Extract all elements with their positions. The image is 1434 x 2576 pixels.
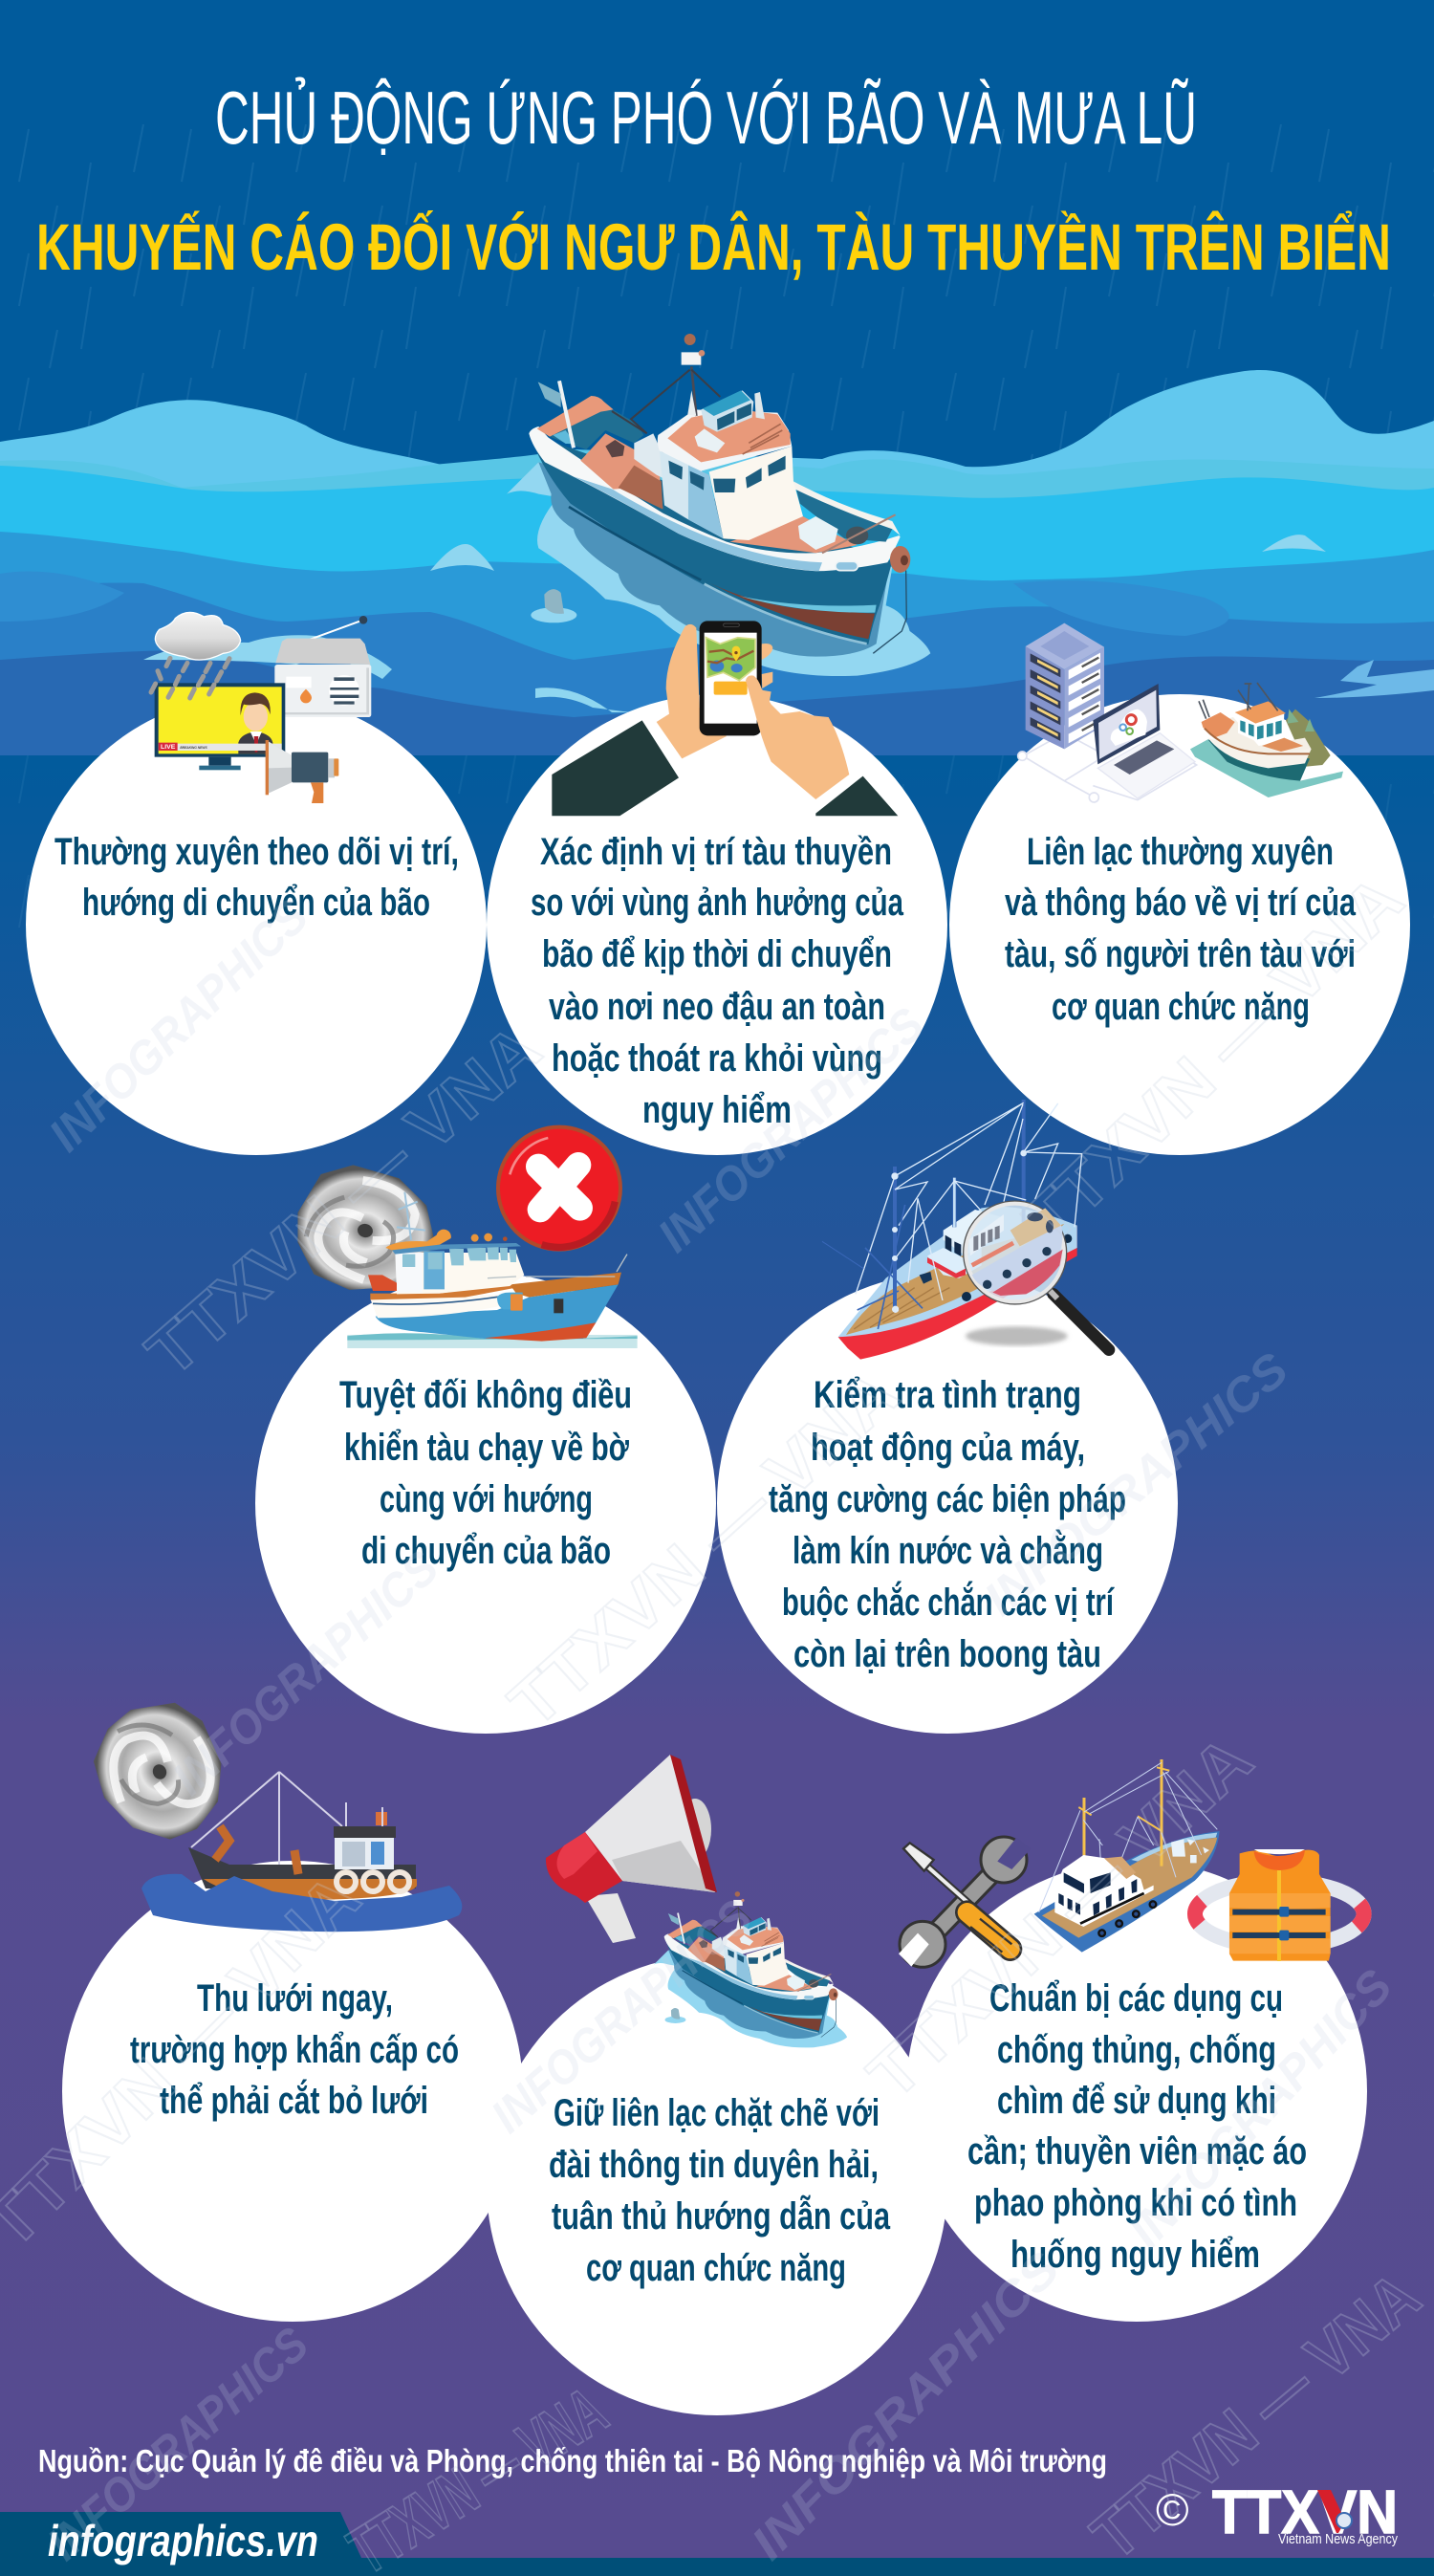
watermarks: INFOGRAPHICS bbox=[648, 997, 934, 1262]
watermarks: TTXVN — VNA bbox=[133, 1010, 554, 1390]
circle bbox=[26, 694, 487, 1155]
circle bbox=[906, 1861, 1367, 2322]
text: Kiểm tra tình trạng bbox=[814, 1374, 1081, 1416]
rain bbox=[0, 124, 1434, 497]
text: trường hợp khẩn cấp có bbox=[130, 2029, 459, 2071]
panel: monitor the storm bbox=[26, 612, 487, 1155]
sea waves bbox=[0, 370, 1434, 755]
text bbox=[130, 1977, 459, 2122]
rain over lower background bbox=[0, 755, 1434, 947]
text: cơ quan chức năng bbox=[586, 2247, 846, 2289]
text bbox=[967, 1977, 1307, 2276]
icon: weather news, radio and megaphone bbox=[151, 612, 371, 803]
icon: weather news, radio and megaphone: LIVE bbox=[161, 744, 175, 751]
text: phao phòng khi có tình bbox=[974, 2182, 1297, 2224]
text: hoạt động của máy, bbox=[811, 1427, 1085, 1469]
panel: stay in contact bbox=[949, 623, 1410, 1155]
text: buộc chắc chắn các vị trí bbox=[782, 1580, 1115, 1624]
icon: motor boat bbox=[347, 1192, 638, 1348]
text bbox=[769, 1374, 1126, 1675]
panel: inspect engine and deck bbox=[717, 1100, 1178, 1734]
panel: locate vessel bbox=[487, 621, 947, 1155]
text: nguy hiểm bbox=[642, 1089, 792, 1131]
text: di chuyển của bão bbox=[361, 1530, 611, 1572]
website label: infographics.vn bbox=[48, 2516, 318, 2565]
text: làm kín nước và chằng bbox=[793, 1528, 1103, 1572]
watermarks: INFOGRAPHICS bbox=[741, 2241, 1070, 2570]
text: Giữ liên lạc chặt chẽ với bbox=[554, 2092, 880, 2134]
watermarks: INFOGRAPHICS bbox=[1119, 1959, 1402, 2259]
logo: TTXVN: Vietnam News Agency bbox=[1278, 2531, 1398, 2547]
icon: trawler under magnifying glass bbox=[822, 1100, 1109, 1360]
text: thể phải cắt bỏ lưới bbox=[160, 2078, 428, 2122]
panel: retrieve nets bbox=[62, 1685, 523, 2322]
icon: storm bbox=[282, 1154, 447, 1307]
panel: do not sail with storm bbox=[255, 1127, 716, 1734]
text: Liên lạc thường xuyên bbox=[1027, 831, 1334, 873]
icon: storm bbox=[76, 1685, 243, 1859]
text bbox=[531, 831, 904, 1131]
watermarks bbox=[0, 862, 1433, 2576]
text: khiển tàu chạy về bờ bbox=[344, 1427, 629, 1469]
panel: prepare equipment bbox=[899, 1759, 1367, 2322]
icon: weather news, radio and megaphone: BREAKING NEWS bbox=[180, 746, 207, 750]
watermarks: TTXVN — VNA bbox=[854, 1721, 1266, 2113]
text bbox=[1005, 831, 1357, 1028]
circle bbox=[487, 694, 947, 1155]
logo: TTXVN: TTXVN bbox=[1212, 2478, 1398, 2546]
text: cần; thuyền viên mặc áo bbox=[967, 2130, 1307, 2172]
circle bbox=[255, 1273, 716, 1734]
text: vào nơi neo đậu an toàn bbox=[549, 986, 885, 1028]
icon: small fishing boat bbox=[654, 1891, 847, 2047]
text: Thường xuyên theo dõi vị trí, bbox=[54, 831, 459, 873]
text: Xác định vị trí tàu thuyền bbox=[540, 831, 892, 873]
watermarks: INFOGRAPHICS bbox=[481, 1889, 762, 2143]
watermarks: INFOGRAPHICS bbox=[974, 1343, 1298, 1626]
text: còn lại trên boong tàu bbox=[793, 1633, 1101, 1675]
circle bbox=[949, 694, 1410, 1155]
text: đài thông tin duyên hải, bbox=[549, 2144, 879, 2186]
text: chìm để sử dụng khi bbox=[997, 2080, 1276, 2122]
text: hướng di chuyển của bão bbox=[82, 882, 430, 924]
text bbox=[339, 1374, 632, 1572]
text: tăng cường các biện pháp bbox=[769, 1478, 1126, 1520]
icon: server, laptop and boat bbox=[1018, 623, 1343, 802]
text: Tuyệt đối không điều bbox=[339, 1374, 632, 1416]
text: tuân thủ hướng dẫn của bbox=[552, 2194, 891, 2238]
watermarks: INFOGRAPHICS bbox=[39, 889, 318, 1162]
text: so với vùng ảnh hưởng của bbox=[531, 882, 904, 924]
watermarks: TTXVN — VNA bbox=[1010, 862, 1417, 1258]
watermarks: INFOGRAPHICS bbox=[163, 1540, 448, 1805]
text: hoặc thoát ra khỏi vùng bbox=[552, 1037, 882, 1080]
text bbox=[549, 2092, 891, 2289]
panel: stay in touch with coastal radio bbox=[487, 1755, 947, 2415]
watermarks: INFOGRAPHICS bbox=[37, 2317, 318, 2570]
text: huống nguy hiểm bbox=[1010, 2234, 1260, 2276]
watermarks: TTXVN — VNA bbox=[495, 1355, 912, 1741]
circle bbox=[717, 1273, 1178, 1734]
circle bbox=[62, 1861, 523, 2322]
text: cơ quan chức năng bbox=[1052, 986, 1310, 1028]
text: bão để kịp thời di chuyển bbox=[542, 933, 892, 975]
footer bar bbox=[0, 2512, 1434, 2576]
icon: red prohibition cross bbox=[498, 1127, 620, 1250]
text: Chuẩn bị các dụng cụ bbox=[989, 1977, 1283, 2019]
text bbox=[54, 831, 459, 924]
icon: tools, ship and life vest bbox=[899, 1759, 1364, 1967]
text: chống thủng, chống bbox=[997, 2029, 1276, 2071]
icon: hands and smartphone map bbox=[552, 621, 898, 816]
icon: fishing boat in waves bbox=[141, 1772, 462, 1932]
text: Thu lưới ngay, bbox=[197, 1977, 393, 2019]
source note: Nguồn: Cục Quản lý đê điều và Phòng, chống thiên tai - Bộ Nông nghiệp và Môi trường bbox=[38, 2443, 1107, 2478]
circle bbox=[487, 1954, 947, 2415]
hero fishing boat illustration bbox=[507, 334, 930, 676]
icon: red megaphone bbox=[546, 1755, 717, 1943]
logo: TTXVN: © bbox=[1156, 2484, 1189, 2535]
text: cùng với hướng bbox=[380, 1478, 593, 1520]
